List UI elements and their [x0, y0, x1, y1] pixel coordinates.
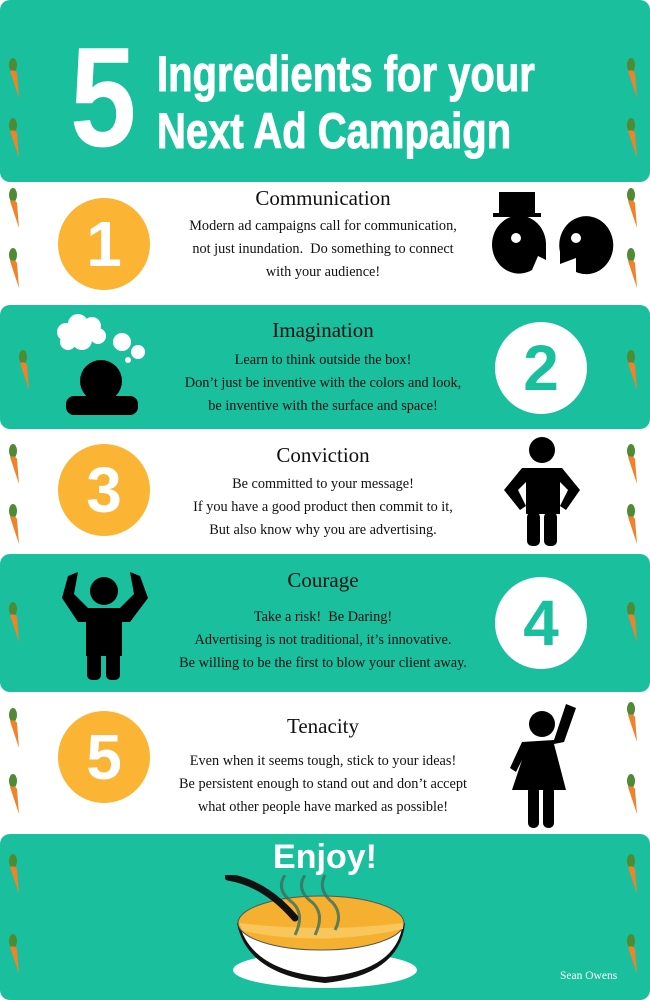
text: imagination: Don’t just be inventive with the colors and look, — [185, 375, 461, 391]
text: tenacity: what other people have marked as possible! — [198, 799, 448, 815]
number circle 3 — [58, 444, 150, 536]
number circle 1: 1 — [86, 208, 122, 280]
panel: communication — [0, 182, 650, 304]
number circle 3: 3 — [86, 454, 122, 526]
icon: woman waving — [510, 704, 576, 828]
number circle 2 — [495, 322, 587, 414]
panel: conviction — [0, 430, 650, 553]
heading: communication: Communication — [255, 186, 391, 210]
heading: courage: Courage — [287, 568, 359, 592]
panel: footer — [0, 834, 650, 1000]
text: conviction: But also know why you are advertising. — [209, 522, 437, 538]
text: courage — [179, 609, 467, 671]
text: tenacity: Be persistent enough to stand out and don’t accept — [179, 776, 467, 792]
heading: enjoy: Enjoy! — [273, 838, 377, 876]
text: tenacity — [179, 753, 467, 815]
text: conviction — [193, 476, 453, 538]
number circle 4 — [495, 577, 587, 669]
text: conviction: If you have a good product then commit to it, — [193, 499, 453, 515]
text: tenacity: Even when it seems tough, stick to your ideas! — [190, 753, 456, 769]
heading: tenacity: Tenacity — [287, 714, 359, 738]
panel: header — [0, 0, 650, 182]
text: communication: Modern ad campaigns call for communication, — [189, 218, 457, 234]
icon: person hands on hips — [504, 437, 580, 546]
text: courage: Be willing to be the first to blow your client away. — [179, 655, 467, 671]
text: courage: Advertising is not traditional, it’s innovative. — [195, 632, 451, 648]
text: communication — [189, 218, 457, 280]
text: imagination: Learn to think outside the box! — [235, 352, 411, 368]
text: communication: not just inundation. Do something to connect — [192, 241, 454, 257]
title number 5: 5 — [70, 18, 136, 177]
number circle 5 — [58, 711, 150, 803]
number circle 4: 4 — [523, 587, 559, 659]
text: conviction: Be committed to your message! — [232, 476, 414, 492]
icon: two faces with top hat — [492, 192, 614, 274]
title text — [157, 46, 535, 159]
text: imagination: be inventive with the surface and space! — [208, 398, 438, 414]
panel: tenacity — [0, 693, 650, 832]
heading: imagination: Imagination — [272, 318, 374, 342]
panel: courage — [0, 554, 650, 692]
title text: Next Ad Campaign — [157, 103, 511, 159]
text: communication: with your audience! — [266, 264, 380, 280]
panel: imagination — [0, 305, 650, 429]
icon: thinking head — [57, 314, 145, 415]
number circle 5: 5 — [86, 721, 122, 793]
heading: conviction: Conviction — [276, 443, 370, 467]
title text: Ingredients for your — [157, 46, 535, 102]
text: imagination — [185, 352, 461, 414]
number circle 1 — [58, 198, 150, 290]
credit: Sean Owens — [560, 970, 617, 982]
text: courage: Take a risk! Be Daring! — [254, 609, 392, 625]
icon: person arms up — [62, 572, 148, 680]
number circle 2: 2 — [523, 332, 559, 404]
icon: soup bowl — [225, 875, 417, 988]
